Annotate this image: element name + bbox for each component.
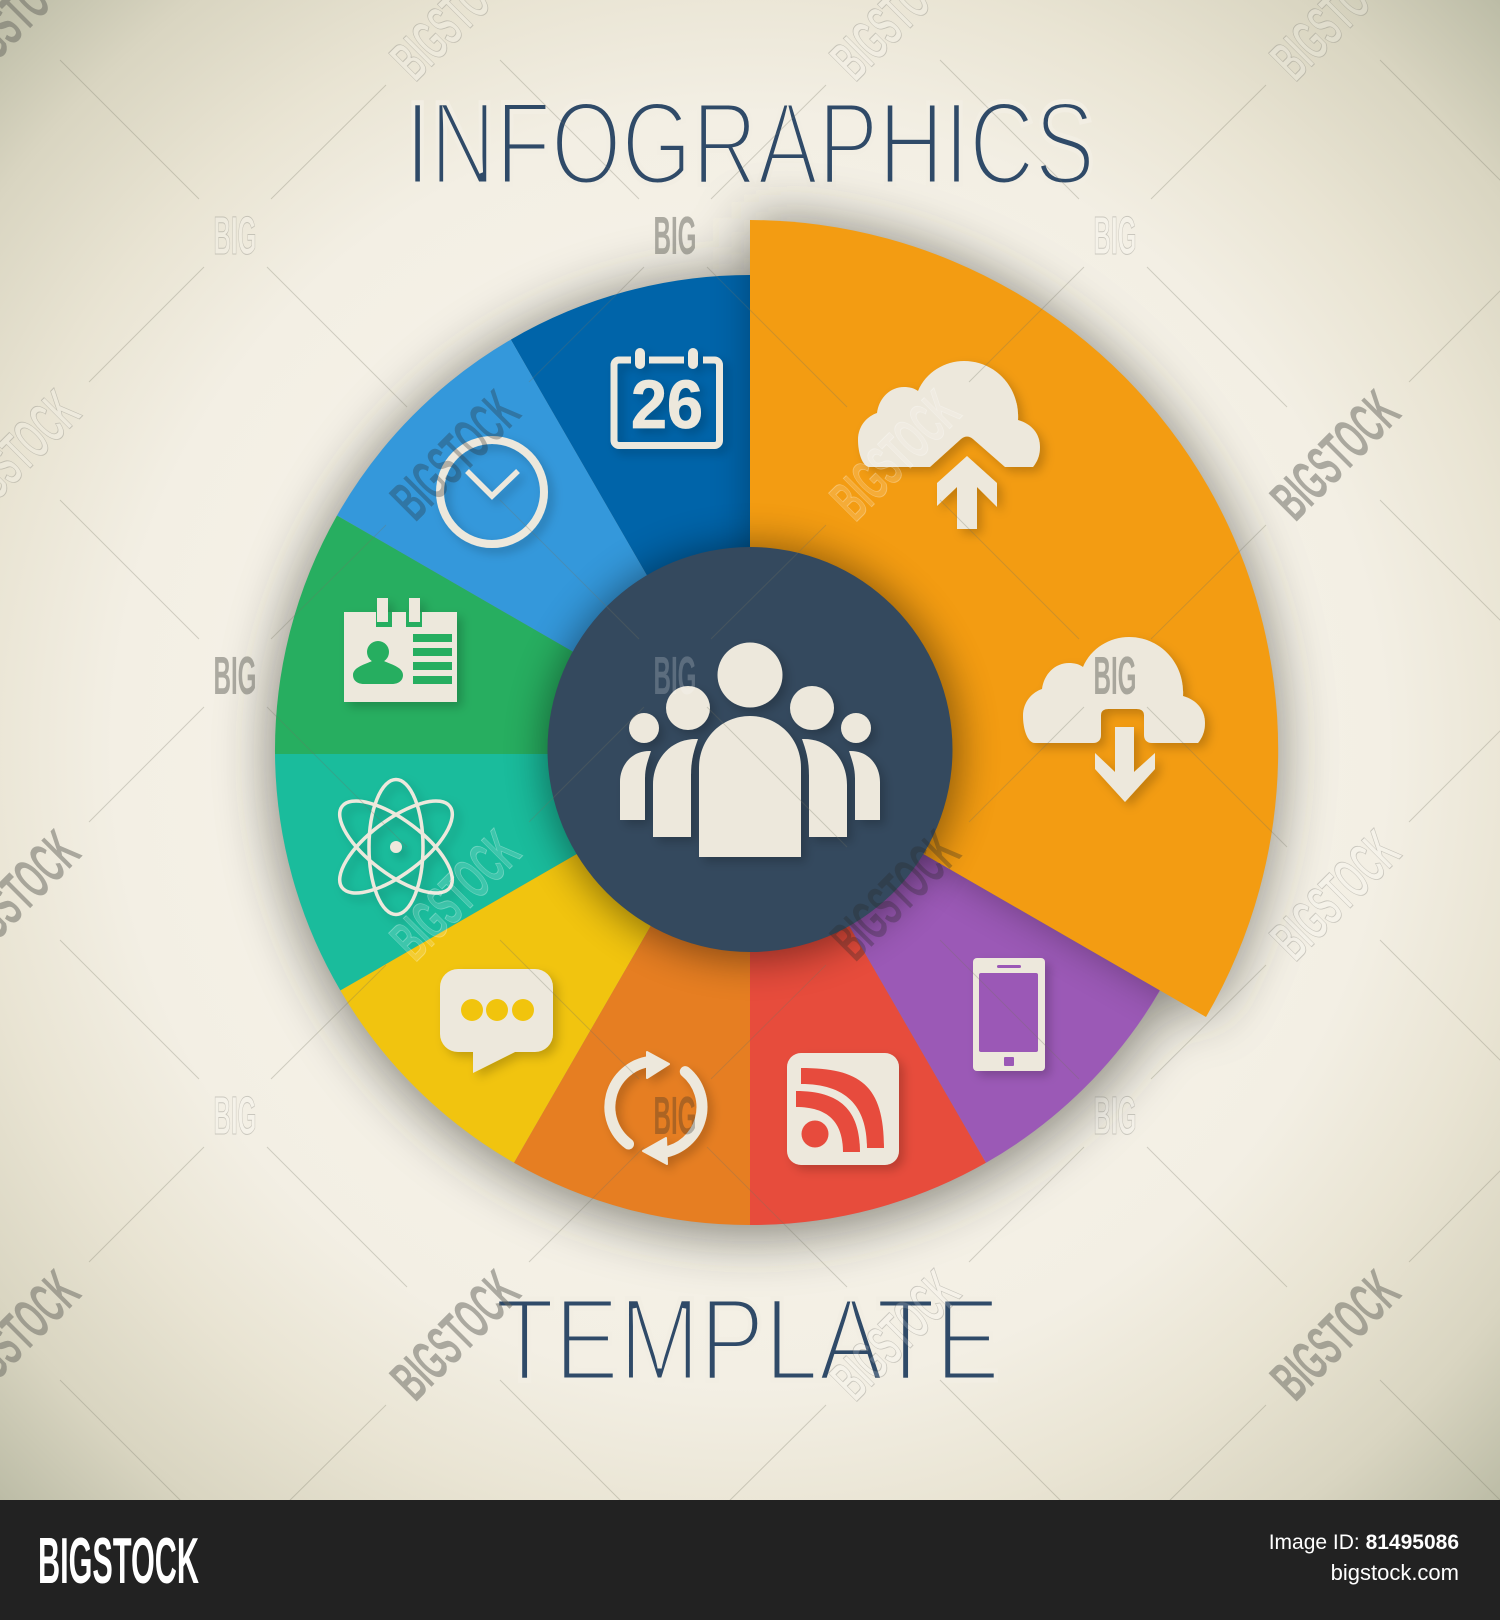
icon: refresh arrows (610, 1052, 702, 1164)
icon: calendar: 26 (631, 366, 703, 443)
pie chart (275, 275, 1160, 1225)
title: TEMPLATE: TEMPLATE (495, 1274, 1000, 1406)
slice: blue (337, 340, 750, 754)
icon: calendar (614, 348, 720, 446)
stock watermark: BIGSTOCK (379, 1259, 532, 1412)
stock watermark: BIG (1094, 646, 1136, 706)
stock watermark: BIGSTOCK (819, 1259, 972, 1412)
stock watermark: BIGSTOCK (379, 379, 532, 532)
icon: cloud upload (858, 361, 1040, 529)
icon: atom (326, 780, 466, 914)
stock watermark: BIG (1094, 1086, 1136, 1146)
icon: smartphone (973, 958, 1045, 1071)
pie drop shadow (272, 220, 1278, 1236)
slice: green (275, 516, 750, 754)
shadow of large orange slice (732, 275, 1160, 1006)
icon: id badge (344, 598, 457, 702)
shadow of centre circle (544, 544, 960, 960)
slice: dark blue (511, 275, 750, 754)
stock watermark: BIG (654, 646, 696, 706)
stock watermark: BIG (1094, 206, 1136, 266)
icon: cloud download (1023, 637, 1205, 802)
stock watermark: BIG (654, 206, 696, 266)
slice: red (750, 754, 986, 1225)
stock watermark: BIGSTOCK (819, 819, 972, 972)
stock watermark: BIGSTOCK (819, 379, 972, 532)
footer bar: BIGSTOCK (38, 1524, 199, 1597)
icon: rss (787, 1053, 899, 1165)
icon: speech bubble (440, 969, 553, 1073)
stock watermark: BIG (214, 1086, 256, 1146)
image id: Image ID: 81495086 (1269, 1531, 1459, 1554)
stock watermark: BIG (654, 1086, 696, 1146)
site url: bigstock.com (1331, 1560, 1459, 1585)
large orange slice (750, 220, 1278, 1017)
stock watermark: BIG (214, 206, 256, 266)
slice: orange (514, 754, 750, 1225)
icon: clock (440, 440, 544, 544)
slice: teal (275, 754, 750, 990)
footer bar (0, 1500, 1500, 1620)
title: INFOGRAPHICS: INFOGRAPHICS (405, 78, 1095, 210)
icon: people group (620, 642, 880, 857)
slice: yellow (340, 754, 750, 1163)
stock watermark: BIG (214, 646, 256, 706)
centre circle (548, 547, 952, 952)
stock watermark: BIGSTOCK (379, 819, 532, 972)
slice: purple (750, 754, 1160, 1163)
